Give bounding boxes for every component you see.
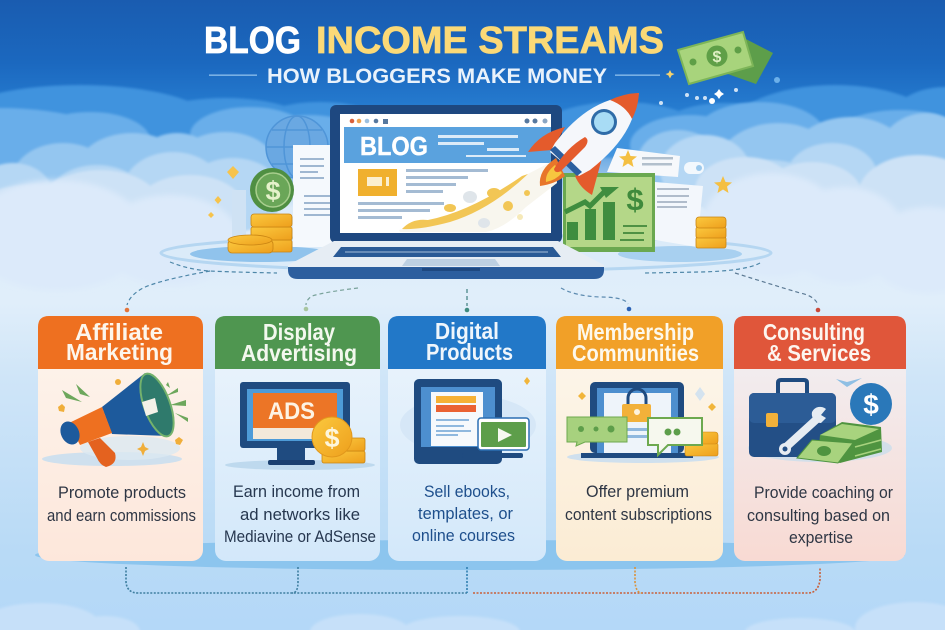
description: content subscriptions (565, 505, 712, 524)
cloud shape (684, 162, 704, 174)
browser window (340, 114, 551, 233)
icon: coin stack right (696, 217, 726, 248)
heading: Display (263, 319, 335, 345)
description: templates, or (418, 504, 513, 523)
icon: star (714, 176, 732, 193)
description: expertise (789, 528, 853, 547)
document (655, 182, 703, 247)
icon: tablet with video (400, 377, 536, 464)
icon: green cash chart: $ (626, 182, 644, 217)
platform ring (161, 235, 771, 271)
rocket trail (399, 160, 557, 232)
icon: coin stack low (228, 235, 273, 253)
icon: briefcase wrench and cash: $ (863, 389, 879, 420)
icon: ads monitor: $ (324, 423, 340, 453)
title: INCOME STREAMS (316, 20, 664, 62)
heading (572, 319, 699, 366)
heading: Consulting (763, 319, 865, 345)
icon: flying dollar bills (659, 32, 780, 105)
icon: coin stack tall (251, 214, 292, 252)
heading (66, 319, 173, 365)
subtitle: HOW BLOGGERS MAKE MONEY (267, 65, 607, 88)
icon: briefcase wrench and cash (748, 378, 892, 463)
platform shadow (190, 246, 742, 262)
icon: orange tile (358, 169, 397, 196)
laptop base (288, 241, 604, 279)
description: consulting based on (747, 506, 890, 525)
description: online courses (412, 526, 515, 545)
description: Mediavine or AdSense (224, 527, 376, 546)
document lines (300, 158, 330, 216)
card shadow band (35, 540, 905, 570)
description (412, 482, 515, 545)
heading: Communities (572, 340, 699, 366)
description: ad networks like (240, 505, 360, 524)
laptop screen frame (330, 105, 562, 243)
centre fin (554, 137, 588, 172)
icon: ads monitor (225, 382, 375, 470)
nose cone (610, 93, 639, 119)
heading: Marketing (66, 339, 173, 365)
panel header (556, 316, 723, 369)
title: BLOG (204, 20, 301, 62)
icon: flying dollar bills: $ (713, 49, 722, 66)
text lines (358, 169, 488, 219)
icon: megaphone (42, 370, 188, 467)
faint building (232, 190, 246, 238)
panel header (734, 316, 906, 369)
heading: & Services (767, 340, 871, 366)
description: Provide coaching or (754, 483, 893, 502)
icon: green cash chart (563, 173, 655, 252)
panel: Consulting & Services (734, 316, 906, 561)
illustration: right money and documents (563, 148, 732, 252)
connector end dots (125, 307, 820, 312)
left fin (528, 127, 565, 152)
sparkles (208, 166, 239, 218)
panel: Affiliate Marketing (38, 316, 203, 561)
icon: dollar coin: $ (265, 176, 281, 206)
heading (763, 319, 871, 366)
illustration: left money and documents (208, 116, 332, 253)
description (224, 482, 376, 546)
description: and earn commissions (47, 506, 196, 525)
connectors: top dashed (127, 262, 818, 306)
note with star (607, 148, 680, 177)
panel: Membership Communities (556, 316, 723, 561)
blog heading: BLOG (360, 131, 428, 161)
heading: Membership (577, 319, 694, 345)
description: Earn income from (233, 482, 360, 501)
document (293, 145, 332, 247)
flame (540, 158, 565, 186)
panel: Display Advertising (215, 316, 380, 561)
blue band (550, 146, 582, 176)
heading: Digital (435, 318, 499, 344)
body (550, 93, 639, 176)
heading: Advertising (241, 340, 357, 366)
laptop (35, 93, 906, 593)
heading (426, 318, 513, 365)
heading: Affiliate (75, 319, 163, 345)
right fin (575, 158, 602, 195)
banner lines (438, 135, 526, 157)
heading (241, 319, 357, 366)
description: Sell ebooks, (424, 482, 510, 501)
panel header (388, 316, 546, 369)
description: Promote products (58, 483, 186, 502)
description: Offer premium (586, 482, 689, 501)
panel: Digital Products (388, 316, 546, 561)
window dots (350, 118, 548, 124)
window (591, 109, 617, 135)
description (565, 482, 712, 524)
heading: Products (426, 339, 513, 365)
description (47, 483, 196, 525)
connectors: bottom dashed (126, 567, 820, 593)
icon: membership laptop (567, 382, 719, 463)
icon: globe (266, 116, 328, 178)
description (747, 483, 893, 547)
panel header (38, 316, 203, 369)
rocket (528, 93, 639, 195)
panel header (215, 316, 380, 369)
icon: ads monitor: ADS (268, 398, 315, 425)
